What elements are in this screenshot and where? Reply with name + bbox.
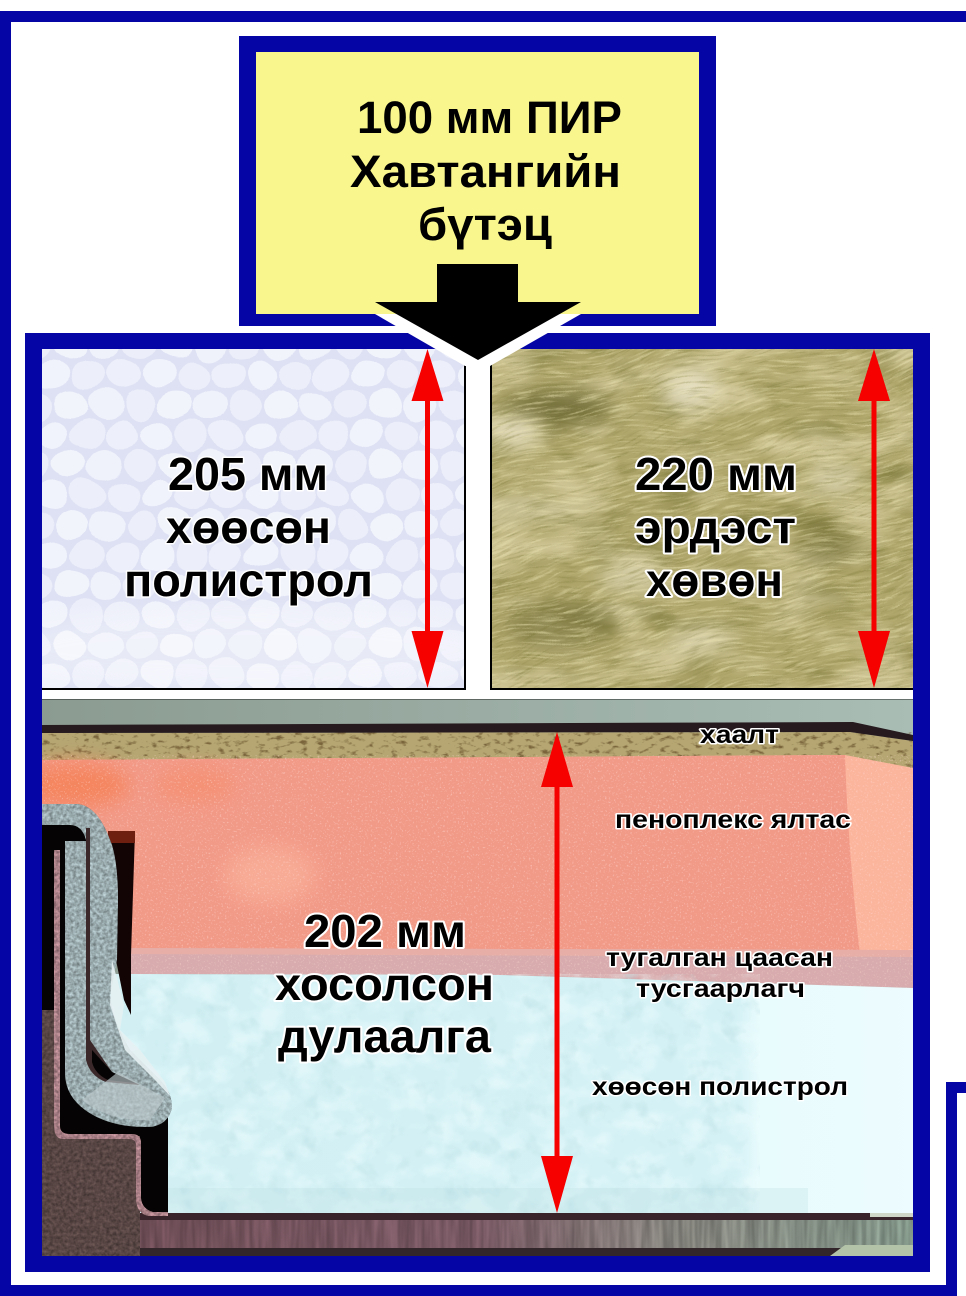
polystyrene label: [124, 448, 373, 606]
label: barrier: хаалт: [700, 721, 779, 749]
panel: combined insulation cross-section: [20, 698, 913, 1256]
polystyrene label: хөөсөн: [166, 501, 331, 553]
cross-section main label: хосолсон: [275, 958, 494, 1010]
main blue panel frame: [25, 333, 930, 1272]
metal joint: [42, 804, 172, 1256]
label: penoplex sheet: пеноплекс ялтас: [615, 806, 851, 834]
label: foil insulator: тугалган цаасан: [606, 944, 833, 972]
mineral wool label: 220 мм: [635, 448, 797, 500]
polystyrene label: полистрол: [124, 554, 373, 606]
photo: layered section: [20, 698, 913, 1256]
mineral wool label: хөвөн: [646, 554, 783, 606]
cross-section main label: [275, 905, 494, 1062]
polystyrene label: 205 мм: [168, 448, 328, 500]
label: foil insulator: [606, 944, 833, 1003]
title panel: [239, 36, 716, 326]
label: foil insulator: тусгаарлагч: [636, 975, 805, 1003]
panel: expanded polystyrene: [42, 349, 466, 690]
panel: mineral wool: [490, 349, 913, 690]
cross-section main label: дулаалга: [278, 1010, 491, 1062]
cross-section main label: 202 мм: [304, 905, 466, 957]
label: expanded polystyrene: хөөсөн полистрол: [592, 1073, 848, 1101]
title text: [350, 92, 622, 250]
arrow: combined insulation dimension: [541, 732, 573, 1213]
mineral wool label: [635, 448, 797, 606]
arrow: polystyrene dimension: [412, 349, 444, 688]
arrow: mineral wool dimension: [858, 349, 890, 688]
mineral wool label: эрдэст: [635, 501, 796, 553]
title text: 100 мм ПИР: [357, 92, 622, 143]
panel: white backing: [42, 349, 913, 699]
title text: Хавтангийн: [350, 146, 621, 197]
arrow: big downward arrow: [375, 264, 581, 366]
title text: бүтэц: [418, 199, 552, 250]
